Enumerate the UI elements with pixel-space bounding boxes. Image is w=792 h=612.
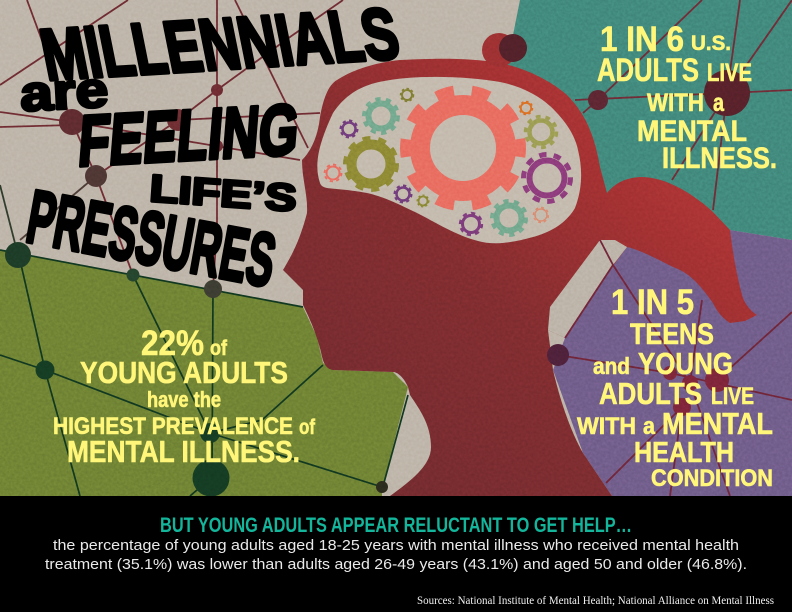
gear: large coral bbox=[406, 91, 520, 205]
network: green lines bbox=[0, 250, 408, 496]
gear: olive right bbox=[526, 116, 556, 148]
network: dark node at bun bbox=[499, 34, 527, 62]
callout: 1 in 5 teens: MENTAL bbox=[662, 406, 773, 441]
callout: 22% of young adults: HIGHEST PREVALENCE bbox=[53, 413, 293, 440]
sliver line bbox=[565, 240, 613, 338]
gear: green bottom bbox=[492, 201, 526, 235]
title line: PRESSURES: PRESSURES bbox=[21, 174, 282, 303]
title line: LIFE'S: LIFE’S bbox=[148, 168, 298, 220]
footer body text: the percentage of young adults aged 18-25 years with mental illness who received mental health bbox=[53, 538, 739, 554]
callout: 1 in 6 adults: LIVE bbox=[707, 59, 752, 87]
footer body text bbox=[45, 538, 747, 573]
network: dark node at shoulder bbox=[547, 344, 569, 366]
gear: small orange bbox=[519, 101, 533, 115]
callout: 1 in 5 teens: a bbox=[643, 413, 656, 440]
gear: purple bottom bbox=[460, 213, 482, 235]
title line: are: are bbox=[19, 61, 109, 122]
callout: 1 in 5 teens: TEENS bbox=[630, 318, 714, 351]
gear: small purple left bbox=[340, 120, 358, 138]
callout: 1 in 5 teens: CONDITION bbox=[651, 465, 773, 492]
callout: 1 in 5 teens: LIVE bbox=[711, 383, 754, 410]
callout: 1 in 5 teens: HEALTH bbox=[634, 437, 734, 469]
callout: 1 in 6 adults: WITH bbox=[647, 89, 704, 117]
panel: purple region bbox=[553, 230, 792, 496]
callout: 1 in 5 teens: WITH bbox=[577, 413, 636, 440]
footer heading: BUT YOUNG ADULTS APPEAR RELUCTANT TO GET HELP… bbox=[160, 514, 632, 537]
callout: 22% of young adults: 22% bbox=[141, 324, 204, 363]
gear: tiny olive lower bbox=[417, 195, 429, 207]
panel: teal region bbox=[500, 0, 792, 240]
footer body text: treatment (35.1%) was lower than adults aged 26-49 years (43.1%) and aged 50 and older (46.8%). bbox=[45, 557, 747, 573]
gears bbox=[324, 88, 570, 235]
brain cutout bbox=[317, 77, 581, 243]
network: purple lines bbox=[558, 265, 792, 496]
network: stone lines bbox=[0, 0, 343, 289]
callout: 1 in 6 adults: U.S. bbox=[691, 32, 731, 55]
callout: 22% of young adults: YOUNG ADULTS bbox=[80, 355, 288, 390]
panel: green region bbox=[0, 250, 408, 496]
callout: 22% of young adults: of bbox=[299, 416, 316, 439]
callout: 1 in 5 teens: and bbox=[593, 353, 630, 379]
gear: large purple bbox=[524, 154, 570, 202]
network: green nodes bbox=[5, 242, 388, 496]
callout: 1 in 6 adults: MENTAL bbox=[637, 115, 747, 148]
title bbox=[19, 0, 405, 303]
callout: 22% of young adults bbox=[53, 324, 316, 469]
title line: FEELING: FEELING bbox=[76, 90, 302, 182]
gear: small coral left bbox=[324, 164, 342, 182]
gear: olive large bbox=[346, 138, 396, 190]
network: teal lines bbox=[575, 0, 792, 210]
callout: 1 in 6 adults bbox=[597, 20, 777, 175]
gear: small orange-pink bbox=[534, 208, 548, 222]
callout: 1 in 5 teens bbox=[577, 283, 773, 492]
silhouette: head in profile with ponytail bbox=[283, 59, 757, 496]
callout: 1 in 5 teens: ADULTS bbox=[599, 376, 702, 411]
callout: 1 in 6 adults: ADULTS bbox=[597, 52, 699, 88]
callout: 1 in 6 adults: 1 IN 6 bbox=[600, 20, 684, 59]
silhouette: hair bun bbox=[482, 33, 516, 67]
callout: 22% of young adults: MENTAL ILLNESS. bbox=[67, 434, 300, 469]
callout: 1 in 6 adults: a bbox=[713, 89, 725, 117]
gear: small olive top bbox=[400, 88, 414, 102]
callout: 1 in 5 teens: 1 IN 5 bbox=[611, 283, 694, 322]
footer band bbox=[0, 496, 792, 612]
network: teal nodes over head bbox=[588, 70, 750, 116]
network: stone nodes bbox=[59, 84, 223, 187]
stone sliver between neck and ponytail bbox=[548, 240, 627, 338]
gear: small purple lower bbox=[394, 186, 412, 202]
callout: 22% of young adults: have the bbox=[147, 387, 221, 412]
callout: 22% of young adults: of bbox=[210, 337, 228, 360]
callout: 1 in 5 teens: YOUNG bbox=[638, 346, 733, 381]
gear: teal upper bbox=[364, 99, 398, 133]
network: purple nodes bbox=[663, 366, 729, 416]
